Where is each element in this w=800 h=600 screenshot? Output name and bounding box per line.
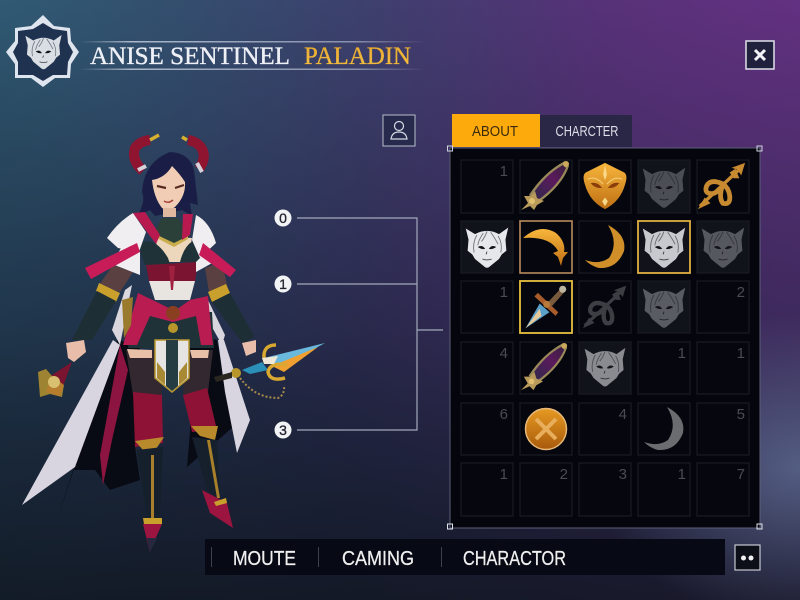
tab: about: ABOUT bbox=[472, 123, 518, 140]
tab: about bbox=[452, 114, 540, 147]
row 6 slots: 3 bbox=[619, 466, 627, 483]
character illustration bbox=[22, 135, 325, 552]
bottom navigation bar: CHARACTOR bbox=[463, 548, 566, 570]
title: ANISE SENTINEL bbox=[90, 43, 290, 70]
row 5 slots: 5 bbox=[737, 406, 745, 423]
bottom navigation bar: MOUTE bbox=[233, 548, 296, 570]
horns bbox=[134, 135, 204, 172]
bottom navigation bar bbox=[205, 539, 725, 575]
shoulders bbox=[85, 212, 236, 279]
left tassel bbox=[38, 362, 72, 397]
connector lines bbox=[297, 218, 443, 430]
profile button bbox=[383, 115, 415, 146]
row 1 slots: 1 bbox=[500, 163, 508, 180]
title: PALADIN bbox=[304, 43, 411, 70]
row 6 slots: 2 bbox=[560, 466, 568, 483]
marker 0: 0 bbox=[279, 210, 287, 226]
row 4 slots: 1 bbox=[678, 345, 686, 362]
row 3 slots bbox=[461, 281, 749, 333]
emblem icon bbox=[6, 15, 79, 87]
row 3 slots: 2 bbox=[737, 284, 745, 301]
marker 3 bbox=[274, 422, 292, 438]
close button bbox=[746, 41, 774, 69]
row 6 slots: 1 bbox=[500, 466, 508, 483]
row 5 slots: 6 bbox=[500, 406, 508, 423]
row 6 slots: 7 bbox=[737, 466, 745, 483]
torso bbox=[140, 218, 203, 300]
cape back bbox=[22, 285, 250, 520]
row 5 slots bbox=[461, 403, 749, 455]
menu button bbox=[735, 545, 760, 570]
marker 1 bbox=[274, 276, 292, 292]
title bbox=[80, 41, 425, 70]
tab: character: CHARCTER bbox=[556, 123, 619, 140]
row 4 slots: 1 bbox=[737, 345, 745, 362]
row 4 slots bbox=[461, 342, 749, 394]
marker 3: 3 bbox=[279, 422, 287, 438]
legs bbox=[126, 349, 213, 395]
row 6 slots: 1 bbox=[678, 466, 686, 483]
marker 1: 1 bbox=[279, 276, 287, 292]
row 5 slots: 4 bbox=[619, 406, 627, 423]
row 2 slots bbox=[461, 221, 749, 273]
boots bbox=[133, 388, 233, 552]
skirt bbox=[122, 293, 214, 348]
hair bbox=[137, 152, 198, 216]
row 1 slots bbox=[461, 160, 749, 213]
arms bbox=[66, 262, 256, 362]
row 6 slots bbox=[461, 463, 749, 516]
skirt front panel bbox=[155, 340, 189, 392]
inventory panel bbox=[448, 146, 762, 529]
spear weapon bbox=[214, 343, 325, 398]
bottom navigation bar: CAMING bbox=[342, 548, 414, 570]
tab: character bbox=[540, 115, 632, 147]
row 3 slots: 1 bbox=[500, 284, 508, 301]
face bbox=[152, 166, 185, 217]
row 4 slots: 4 bbox=[500, 345, 508, 362]
marker 0 bbox=[274, 210, 292, 226]
